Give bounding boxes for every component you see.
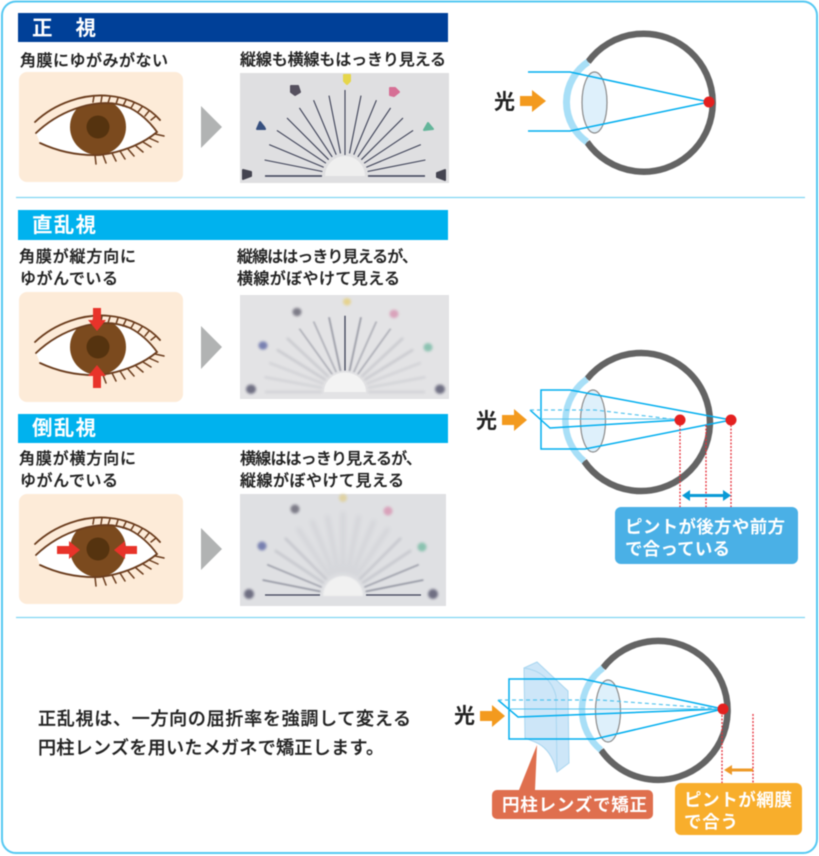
heading: 直乱視 [18,210,448,240]
callout: で合っている [625,539,730,559]
heading: 正視 [18,13,448,42]
arrow [201,326,222,369]
icon: orange arrow [480,705,505,727]
icon: orange arrow [520,90,546,112]
section: against-the-rule astigmatism [18,414,448,606]
section: with-the-rule astigmatism [18,210,449,402]
pointer and lens label: 円柱レンズで矯正 [502,795,647,815]
text block: correction: 正乱視は、一方向の屈折率を強調して変える [38,709,411,729]
label: result: 縦線ははっきり見えるが、 [237,247,418,266]
callout: ピントが後方や前方 [625,517,785,537]
icon: left arrow [114,541,137,559]
focal point [704,96,714,108]
chart: vertical blur fan [240,494,446,606]
chart: sharp fan [240,73,449,183]
orange arrow [724,765,753,775]
focal point [718,704,728,714]
panel: eye with horizontal arrows [19,494,183,604]
eyeball wall [587,34,713,172]
label: cornea: ゆがんでいる [20,269,118,288]
text block: correction [38,709,411,758]
light rays [530,390,731,449]
panel: eye with vertical arrows [19,292,183,402]
heading: 倒乱視: 倒乱視 [32,417,96,440]
label: cornea: 角膜が横方向に [19,449,136,468]
dashed guides [680,425,731,507]
panel: eye [19,72,183,182]
lens [582,72,607,133]
callout [675,783,802,835]
icon: orange arrow [502,409,527,431]
diagram: corrected eye [454,641,802,835]
cornea [565,379,587,461]
icon: up arrow [88,365,106,388]
label: result: 横線がぼやけて見える [237,269,400,288]
label: cornea: 角膜にゆがみがない [20,51,168,70]
callout: ピントが網膜 [684,790,792,810]
cornea [566,62,588,142]
heading: 倒乱視 [18,414,448,443]
label: light: 光 [494,91,515,114]
callout [615,507,798,564]
eyeball wall [601,641,728,780]
eyeball wall [584,353,710,491]
label: cornea [19,247,136,288]
lens [596,680,620,742]
heading: 正視: 正 視 [32,17,96,40]
lens [580,390,606,452]
pointer and lens label [492,745,653,819]
label: cornea [19,449,136,490]
double arrow [682,490,731,501]
arrow [201,528,222,570]
icon: right arrow [57,541,80,559]
label: light: 光 [476,410,497,433]
icon: down arrow [88,308,106,331]
label: light: 光 [454,705,475,728]
label: cornea: 角膜が縦方向に [19,247,136,266]
label: result: 縦線も横線もはっきり見える [240,51,446,69]
label: result [240,449,422,490]
label: cornea: ゆがんでいる [20,471,118,490]
label: result: 縦線がぼやけて見える [240,471,404,490]
label: result [237,247,418,288]
section: normal vision [18,13,449,183]
arrow [201,106,222,148]
light rays [498,679,723,739]
chart: horizontal blur fan [240,295,449,399]
cornea [582,668,603,750]
heading: 直乱視: 直乱視 [32,214,96,237]
focal points [674,414,736,426]
diagram: normal eye [494,34,714,172]
diagram: astigmatic eye [476,353,798,564]
dashed guides [722,714,753,783]
light rays [528,72,709,131]
label: result: 横線ははっきり見えるが、 [240,449,422,468]
text block: correction: 円柱レンズを用いたメガネで矯正します。 [38,737,384,758]
cylindrical lens [524,662,569,772]
callout: で合う [684,812,738,832]
